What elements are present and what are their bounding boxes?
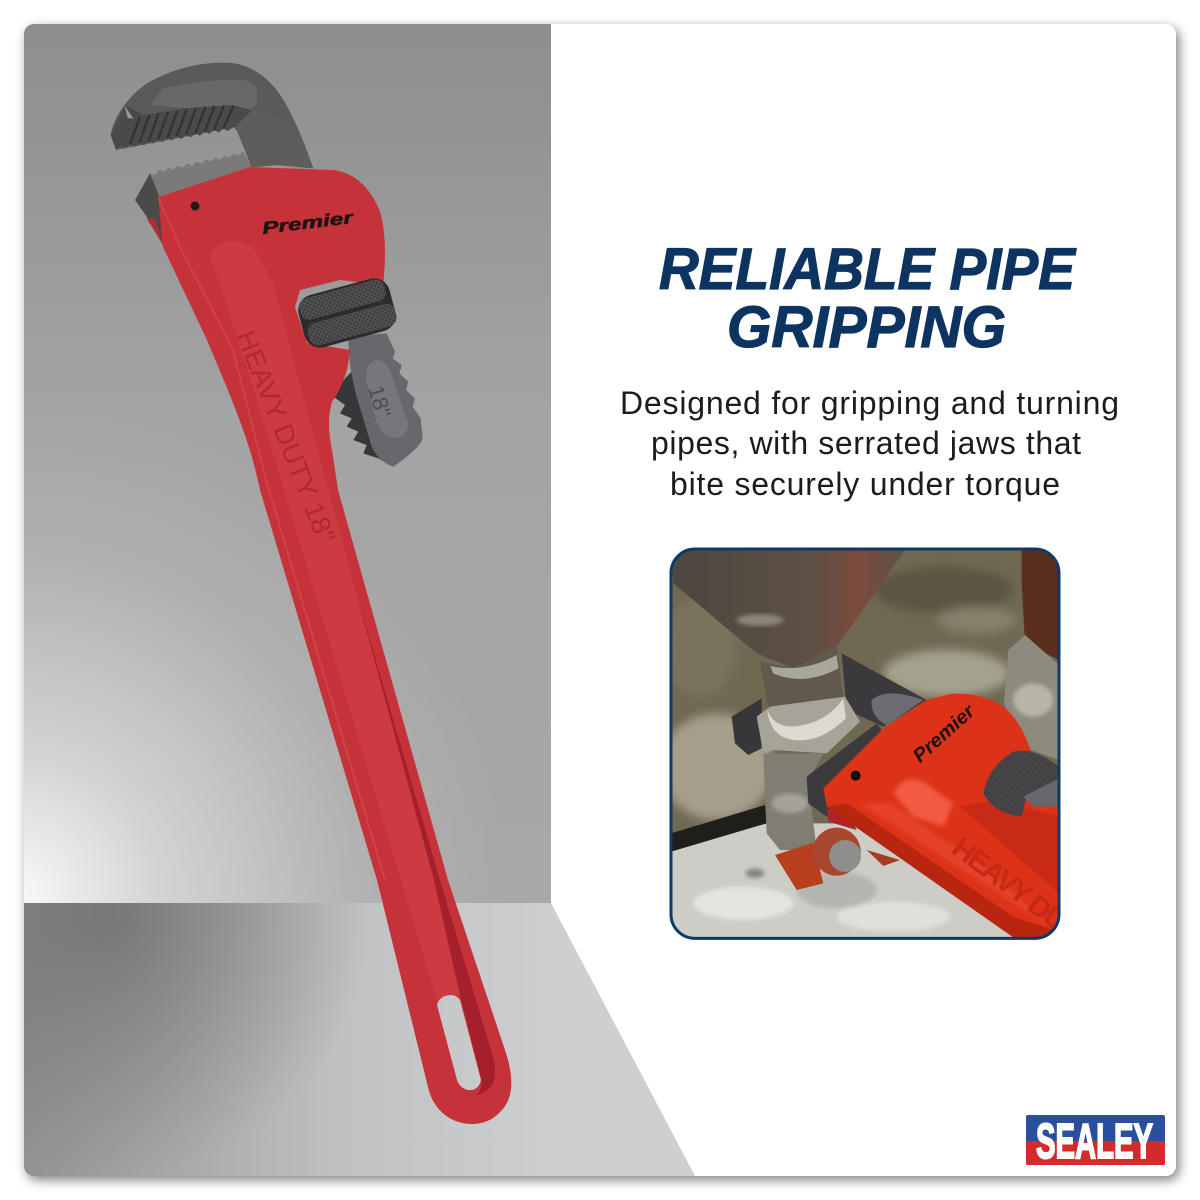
right channel shading	[325, 520, 495, 1096]
photo: wrench on pipe fitting: HEAVY DU	[946, 831, 1073, 938]
heading: RELIABLE PIPE	[659, 237, 1077, 302]
upper jaw	[111, 63, 313, 168]
valve handle	[775, 843, 823, 890]
description text: Designed for gripping and turning	[620, 385, 1119, 421]
heading	[659, 237, 1077, 360]
brand name: Premier: Premier	[261, 208, 356, 238]
red tool body	[823, 694, 1059, 940]
description text: bite securely under torque	[670, 466, 1060, 502]
rear jaw	[732, 698, 762, 755]
sliding jaw teeth	[135, 152, 252, 246]
description text	[620, 385, 1119, 502]
red handle body	[158, 167, 511, 1124]
adjusting nut	[295, 275, 399, 351]
slider hole	[190, 202, 200, 210]
raised rib	[210, 241, 460, 1002]
embossed label: HEAVY DUTY 18: HEAVY DUTY 18"	[230, 326, 341, 547]
heading: GRIPPING	[727, 295, 1006, 360]
lower jaw shank	[333, 333, 423, 467]
jaw size label: 18"	[363, 382, 396, 420]
pipe fitting	[757, 697, 860, 753]
tool jaw	[807, 723, 882, 820]
description text: pipes, with serrated jaws that	[651, 425, 1081, 461]
photo: wrench on pipe fitting	[660, 540, 1073, 950]
photo: wrench on pipe fitting: Premier	[909, 700, 980, 767]
adjusting nut in photo	[983, 751, 1059, 817]
pipe wrench	[111, 63, 511, 1124]
bevel highlight	[158, 197, 385, 880]
panel: studio backdrop	[24, 24, 695, 1176]
